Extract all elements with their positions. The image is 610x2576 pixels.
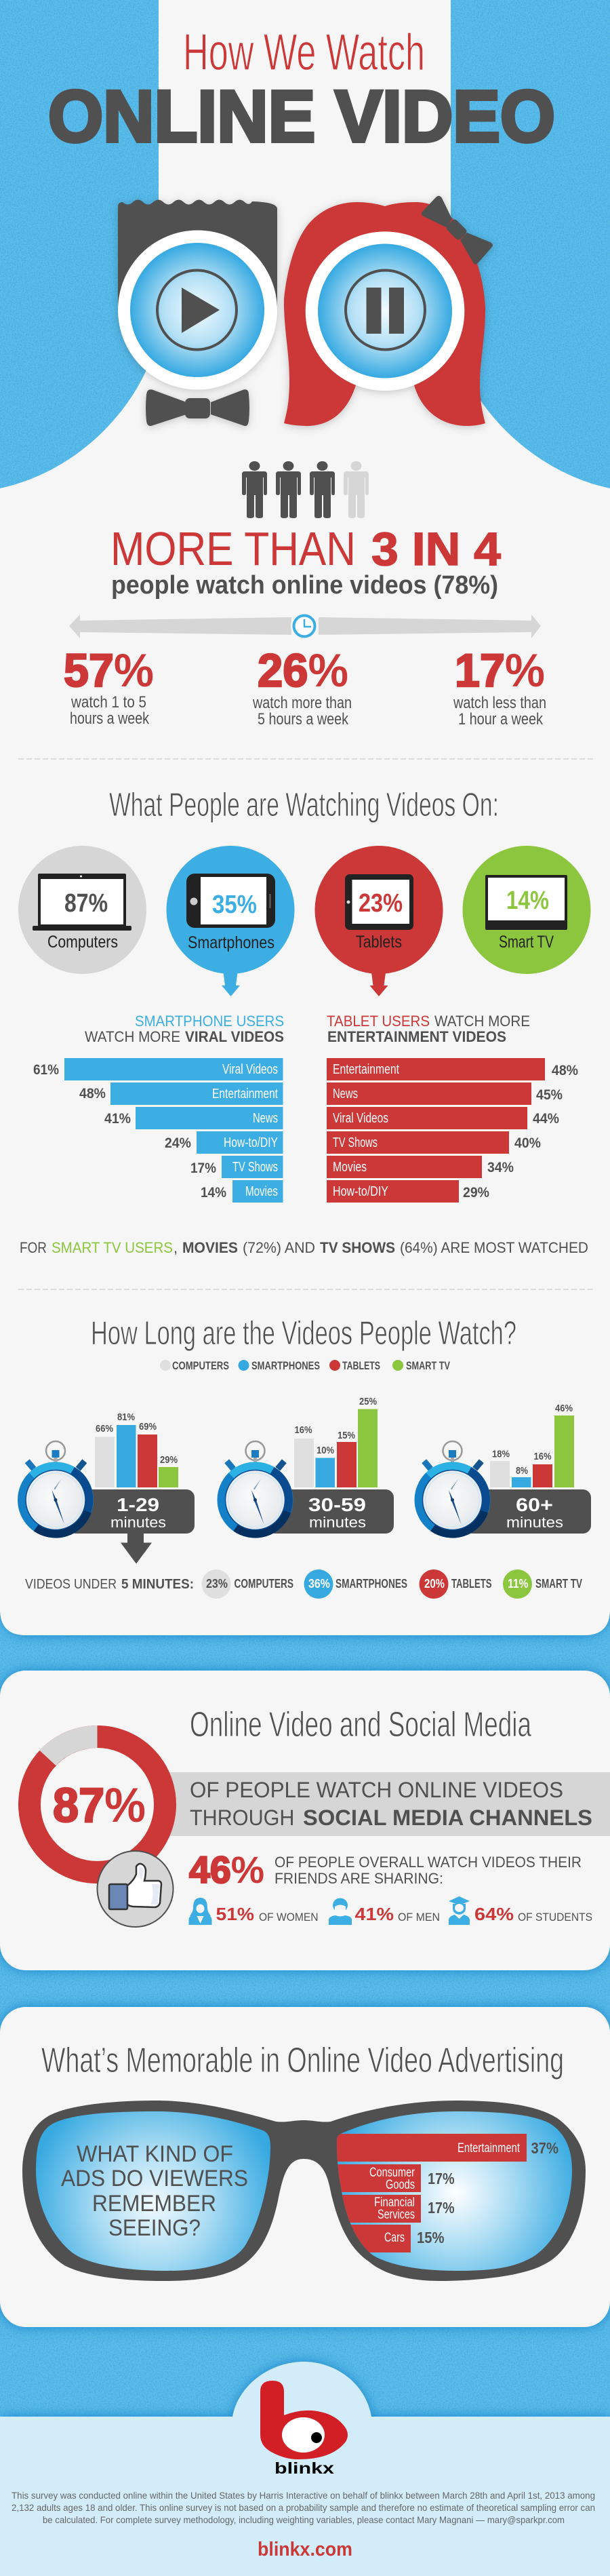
row: videos under 5 minutes: VIDEOS UNDER [25, 1577, 117, 1592]
title [48, 24, 555, 157]
row: videos under 5 minutes: SMARTPHONES [336, 1577, 407, 1591]
lens: ad types bar chart: Entertainment [458, 2141, 521, 2155]
text: smart tv users note: (64%) ARE MOST WATCHED [400, 1239, 588, 1256]
row: videos under 5 minutes: COMPUTERS [235, 1577, 293, 1591]
lens: question [36, 2111, 270, 2271]
link text: blinkx.com: blinkx.com [258, 2539, 352, 2560]
bars: tablet: 48% [552, 1063, 578, 1078]
row: videos under 5 minutes: 23% [206, 1577, 228, 1591]
icon: four people [242, 461, 369, 518]
stat: 46% friends sharing: 46% [189, 1848, 264, 1891]
chart: smartphone users [33, 1013, 284, 1203]
device: smartphones [167, 846, 294, 996]
panel: online video and social media [0, 1671, 610, 1970]
lens: question: REMEMBER [92, 2191, 216, 2217]
bars: smartphone: TV Shows [232, 1160, 278, 1175]
legend: TABLETS [342, 1359, 380, 1372]
illustration: female video head [284, 196, 493, 426]
stat: 46% friends sharing [189, 1848, 582, 1891]
icon: stopwatch [18, 1441, 94, 1538]
stat: students: 64% [474, 1904, 514, 1924]
device: tablets [314, 846, 443, 996]
row: videos under 5 minutes [25, 1569, 582, 1599]
band: grey statement bar: OF PEOPLE WATCH ONLINE VIDEOS [190, 1778, 563, 1802]
band: grey statement bar: THROUGH [190, 1806, 294, 1830]
stat: 17%: 1 hour a week [458, 710, 544, 728]
text: survey methodology: 2,132 adults ages 18 and older. This online survey is not based on a probability sample and therefore no estimate of theoretical sampling error can [12, 2502, 595, 2513]
lens: ad types bar chart: 17% [428, 2170, 454, 2187]
stat: 57%: hours a week [70, 709, 150, 728]
lens: ad types bar chart: Financial [374, 2196, 415, 2210]
lens: ad types bar chart: Goods [386, 2178, 415, 2192]
chart: 1-29 minutes: minutes [110, 1514, 166, 1531]
stat: men: 41% [355, 1904, 394, 1924]
legend [160, 1359, 450, 1372]
text: smart tv users note: (72%) AND [243, 1239, 315, 1256]
device: smart tv: Smart TV [499, 933, 554, 952]
bars: tablet: 34% [487, 1160, 514, 1175]
arrow: time scale with clock [69, 612, 541, 640]
chart: 1-29 minutes: 1-29 [117, 1494, 159, 1515]
lens: ad types bar chart: Consumer [369, 2166, 415, 2180]
text: smart tv users note: MOVIES [182, 1239, 238, 1256]
band: grey statement bar: SOCIAL MEDIA CHANNELS [303, 1806, 592, 1830]
lens: ad types bar chart: Services [378, 2208, 415, 2222]
panel shadow: bottom of main panel [0, 1526, 610, 1635]
stat: 17%: 17% [455, 644, 545, 697]
bars: tablet: How-to/DIY [333, 1184, 388, 1199]
row: videos under 5 minutes: 20% [424, 1577, 445, 1591]
lens: question: ADS DO VIEWERS [61, 2166, 248, 2191]
stat: 46% friends sharing: FRIENDS ARE SHARING: [274, 1870, 443, 1887]
stat: 26%: 5 hours a week [258, 710, 349, 728]
bars: smartphone: News [253, 1111, 278, 1126]
logo: blinkx: blinkx [274, 2459, 334, 2477]
title: How We Watch [183, 24, 425, 81]
device: smart tv: 14% [506, 886, 549, 915]
stat: women: OF WOMEN [259, 1911, 319, 1924]
stat: students [449, 1896, 592, 1925]
bars: smartphone: 14% [201, 1185, 226, 1201]
row: videos under 5 minutes: TABLETS [451, 1577, 492, 1591]
text: survey methodology: This survey was conducted online within the United States by Harris Interactive on behalf of blinkx between March 28th and April 1st, 2013 among [12, 2490, 595, 2501]
stat: women [188, 1898, 319, 1925]
device: tablets: Tablets [356, 933, 402, 952]
stat: 26% [252, 644, 352, 728]
chart: 30-59 minutes [217, 1396, 394, 1538]
chart: 30-59 minutes: 15% [338, 1430, 355, 1441]
heading: tablet users watch more entertainment videos: TABLET USERS [327, 1013, 430, 1030]
chart: 30-59 minutes: 16% [294, 1424, 312, 1436]
chart: 1-29 minutes [18, 1411, 195, 1538]
bars: smartphone: 41% [104, 1111, 131, 1127]
lens: ad types bar chart: 17% [428, 2199, 454, 2217]
legend: SMARTPHONES [251, 1359, 320, 1372]
stat: men [329, 1898, 440, 1925]
bars: smartphone: Movies [245, 1184, 278, 1199]
bars: smartphone [33, 1058, 283, 1203]
chart: 60+ minutes: 8% [516, 1465, 528, 1477]
text: smart tv users note: SMART TV USERS [52, 1239, 173, 1256]
device: smart tv [462, 846, 591, 974]
heading: tablet users watch more entertainment videos: WATCH MORE [434, 1013, 530, 1030]
chart: 60+ minutes [415, 1403, 591, 1538]
band: grey statement bar [163, 1772, 610, 1836]
heading: smartphone users watch more viral videos [85, 1013, 284, 1045]
text: smart tv users note: FOR [20, 1239, 47, 1256]
headline: more than 3 in 4: 3 IN 4 [371, 523, 501, 575]
panel: main white shape [0, 0, 610, 1635]
device: computers [18, 846, 146, 974]
text: survey methodology: be calculated. For complete survey methodology, including weighting variables, please contact Mary Magnani — mary@sparkpr.com [43, 2514, 565, 2525]
bars: tablet: Viral Videos [333, 1111, 388, 1126]
title: ONLINE VIDEO [48, 75, 555, 157]
stat: men: OF MEN [398, 1911, 440, 1924]
text: survey methodology [12, 2490, 595, 2525]
bars: smartphone: 48% [79, 1086, 106, 1101]
chart: 1-29 minutes: 66% [96, 1423, 113, 1435]
row: videos under 5 minutes: 11% [508, 1577, 529, 1591]
chart: 60+ minutes: 60+ [516, 1494, 553, 1515]
stat: 57% [64, 644, 154, 728]
heading: smartphone users watch more viral videos: VIRAL VIDEOS [185, 1028, 284, 1045]
bars: tablet: News [333, 1087, 358, 1101]
text: smart tv users note: TV SHOWS [320, 1239, 395, 1256]
chart: 1-29 minutes: 69% [139, 1421, 157, 1432]
bars: smartphone: How-to/DIY [224, 1135, 278, 1150]
bars: tablet [327, 1058, 578, 1203]
chart: 60+ minutes: 46% [555, 1403, 573, 1414]
stat: 57%: watch 1 to 5 [70, 693, 146, 711]
panel: memorable advertising [0, 2007, 610, 2327]
legend: COMPUTERS [172, 1359, 229, 1372]
stat: women: 51% [216, 1904, 254, 1924]
stat: 17%: watch less than [453, 694, 546, 712]
chart: 60+ minutes: minutes [506, 1514, 563, 1531]
chart: 30-59 minutes: 30-59 [308, 1494, 366, 1515]
chart: 30-59 minutes: 10% [317, 1445, 334, 1456]
device: smartphones: 35% [212, 891, 257, 919]
chart: 87% donut [30, 1725, 165, 1872]
icon: thumbs up [98, 1851, 174, 1927]
bars: tablet: 44% [533, 1111, 559, 1127]
stat: 17% [453, 644, 546, 728]
illustration: male video head [118, 199, 277, 426]
lens: question: WHAT KIND OF [77, 2141, 233, 2167]
headline: more than 3 in 4 [110, 522, 501, 600]
stat: 46% friends sharing: OF PEOPLE OVERALL WATCH VIDEOS THEIR [274, 1854, 582, 1871]
heading: tablet users watch more entertainment videos [327, 1013, 530, 1045]
lens: ad types bar chart: 37% [531, 2139, 558, 2157]
stat: 26%: 26% [258, 644, 348, 697]
bars: smartphone: Viral Videos [222, 1062, 278, 1077]
logo: blinkx [260, 2381, 348, 2477]
device: tablets: 23% [359, 889, 403, 918]
device: computers: Computers [47, 933, 118, 952]
headline: more than 3 in 4: people watch online videos (78%) [111, 571, 498, 600]
chart: tablet users [327, 1013, 578, 1203]
arrow: down to videos under 5 minutes [121, 1534, 152, 1564]
heading: smartphone users watch more viral videos: WATCH MORE [85, 1028, 180, 1045]
chart: 87% donut: 87% [53, 1779, 146, 1833]
chart: 1-29 minutes: 81% [117, 1411, 135, 1423]
stat: 57%: 57% [64, 644, 154, 697]
footer [0, 2362, 610, 2576]
bars: smartphone: 61% [33, 1062, 59, 1078]
row: videos under 5 minutes: 5 MINUTES: [121, 1577, 194, 1592]
heading: tablet users watch more entertainment videos: ENTERTAINMENT VIDEOS [327, 1028, 506, 1045]
stat: students: OF STUDENTS [518, 1911, 592, 1924]
lens: ad types bar chart: Cars [384, 2231, 405, 2245]
device: computers: 87% [64, 889, 108, 918]
heading: smartphone users watch more viral videos: SMARTPHONE USERS [135, 1013, 284, 1030]
bars: tablet: 45% [536, 1087, 563, 1103]
icon: stopwatch [415, 1441, 491, 1538]
headline: more than 3 in 4: MORE THAN [110, 522, 356, 575]
legend: SMART TV [406, 1359, 450, 1372]
chart: 30-59 minutes: minutes [309, 1514, 366, 1531]
illustration: sunglasses frame [22, 2101, 586, 2281]
bars: smartphone: Entertainment [212, 1087, 278, 1101]
chart: 60+ minutes: 18% [492, 1449, 510, 1460]
bars: tablet: TV Shows [333, 1135, 378, 1150]
bars: smartphone: 24% [165, 1135, 191, 1151]
bars: tablet: 29% [463, 1185, 489, 1201]
bars: tablet: 40% [514, 1135, 541, 1151]
bars: smartphone: 17% [190, 1160, 216, 1176]
stat: 26%: watch more than [252, 694, 352, 712]
lens: ad types bar chart: 15% [417, 2229, 445, 2246]
row: videos under 5 minutes: 36% [308, 1577, 330, 1591]
chart: 30-59 minutes: 25% [359, 1396, 377, 1407]
chart: 60+ minutes: 16% [534, 1451, 552, 1462]
text: smart tv users note [20, 1239, 588, 1256]
lens: ad types bar chart [332, 2111, 572, 2271]
icon: stopwatch [217, 1441, 293, 1538]
row: videos under 5 minutes: SMART TV [535, 1577, 582, 1591]
text: smart tv users note: , [174, 1239, 178, 1256]
bars: tablet: Entertainment [333, 1062, 399, 1077]
chart: 1-29 minutes: 29% [160, 1454, 178, 1466]
device: smartphones: Smartphones [188, 933, 274, 952]
bars: tablet: Movies [333, 1160, 367, 1175]
lens: question: SEEING? [108, 2215, 201, 2241]
